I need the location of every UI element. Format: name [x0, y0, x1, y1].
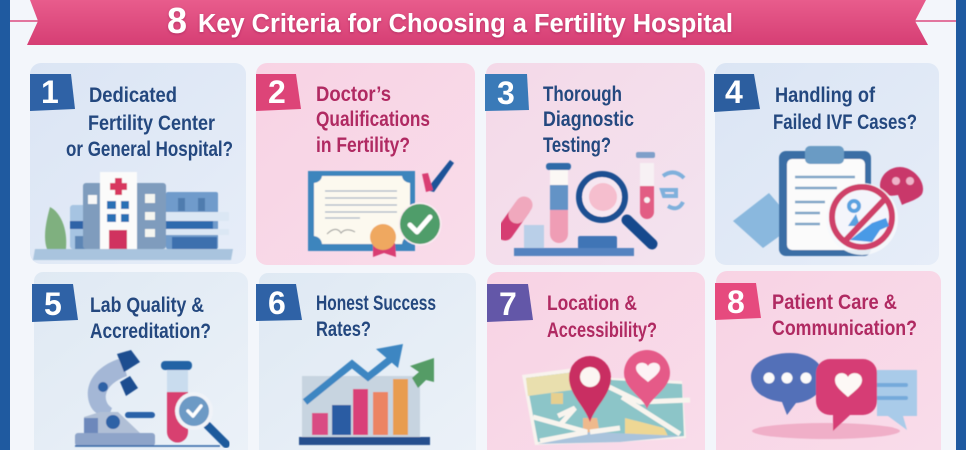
title banner — [10, 0, 956, 45]
number badge 5: 5 — [44, 286, 62, 322]
number badge 8 — [715, 283, 761, 320]
number badge 5 — [32, 284, 78, 322]
panel: criterion 6 — [256, 273, 476, 450]
title: Key Criteria for Choosing a Fertility Hospital — [198, 10, 733, 38]
panel: criterion 2 — [256, 63, 475, 265]
heading 8: Communication? — [772, 317, 917, 340]
heading 5: Accreditation? — [90, 320, 211, 343]
number badge 6: 6 — [268, 285, 286, 321]
heading 2: in Fertility? — [316, 134, 410, 157]
heading 2: Qualifications — [316, 108, 430, 131]
bar chart with rising arrows — [299, 344, 434, 445]
icon: certificate — [308, 160, 454, 257]
panel: criterion 7 — [487, 272, 705, 450]
right border bar — [956, 0, 966, 450]
title: 8 — [167, 0, 187, 41]
number badge 7: 7 — [499, 286, 517, 322]
icon: speech bubbles — [751, 353, 917, 439]
number badge 2 — [256, 74, 301, 111]
heading 4: Handling of — [775, 84, 876, 107]
icon: microscope and tube — [75, 350, 226, 446]
heading 1: Dedicated — [89, 84, 177, 107]
number badge 3: 3 — [497, 75, 515, 111]
heading 8: Patient Care & — [772, 291, 897, 314]
heading 3: Thorough — [543, 83, 622, 106]
heading 6: Rates? — [316, 318, 371, 341]
number badge 6 — [256, 284, 302, 321]
icon: clipboard with prohibition — [733, 146, 923, 256]
panel: criterion 1 — [30, 63, 246, 264]
heading 4: Failed IVF Cases? — [773, 111, 917, 134]
number badge 7 — [487, 284, 533, 322]
panel: criterion 3 — [485, 63, 705, 265]
icon: test tubes and magnifier — [505, 152, 684, 256]
number badge 4 — [714, 74, 760, 112]
heading 2: Doctor’s — [316, 83, 391, 106]
heading 1: Fertility Center — [88, 112, 215, 135]
icon: map with pins — [522, 350, 690, 445]
number badge 4: 4 — [725, 74, 743, 110]
number badge 3 — [485, 74, 529, 111]
panel: criterion 4 — [714, 63, 939, 265]
heading 3: Diagnostic — [543, 108, 634, 131]
number badge 8: 8 — [727, 284, 745, 320]
icon: hospital — [33, 172, 233, 260]
heading 7: Accessibility? — [547, 319, 657, 342]
heading 3: Testing? — [543, 134, 611, 157]
number badge 2: 2 — [268, 74, 286, 110]
heading 7: Location & — [547, 292, 637, 315]
panel: criterion 8 — [715, 271, 941, 450]
heading 5: Lab Quality & — [90, 294, 204, 317]
heading 6: Honest Success — [316, 292, 436, 315]
number badge 1: 1 — [41, 74, 59, 110]
panel: criterion 5 — [32, 272, 248, 450]
heading 1: or General Hospital? — [66, 138, 233, 161]
number badge 1 — [30, 74, 75, 111]
left border bar — [0, 0, 10, 450]
